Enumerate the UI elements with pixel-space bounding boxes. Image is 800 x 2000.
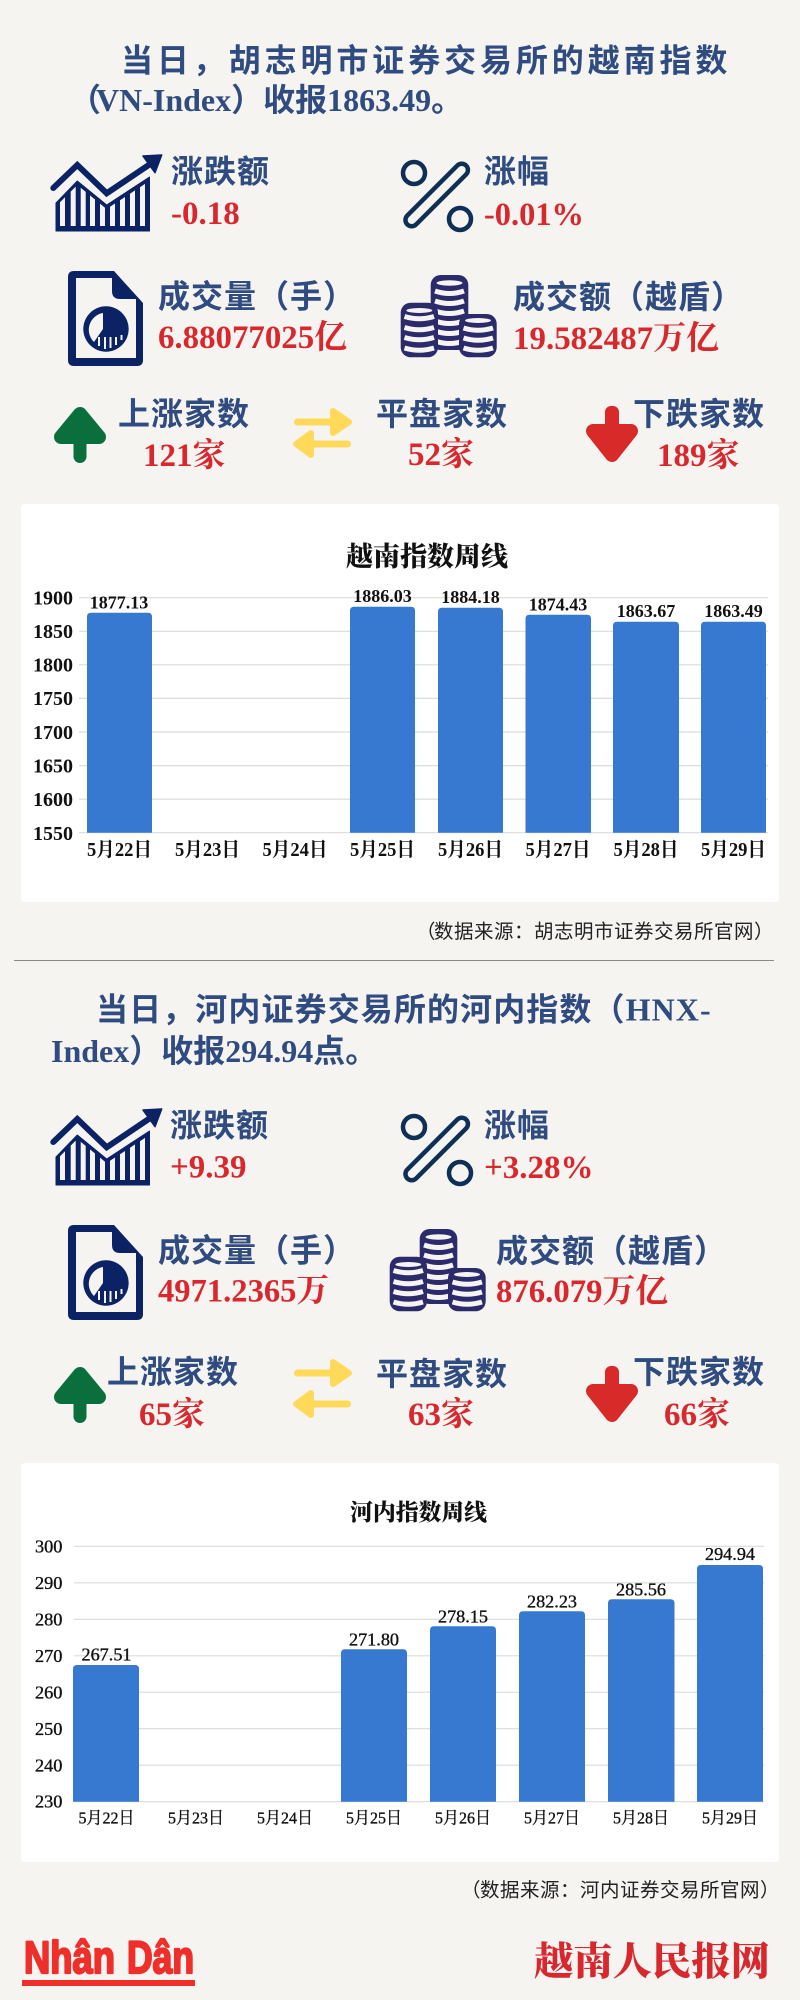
- section title: HNX-Index: [51, 992, 712, 1069]
- bar value labels: 1886.03: [353, 586, 412, 606]
- value: unchanged: 63家: [408, 1396, 474, 1433]
- y axis labels: [35, 1536, 62, 1812]
- bar value labels: [90, 586, 763, 621]
- value: volume: 4971.2365万: [158, 1274, 329, 1310]
- icon: green up arrow: [61, 414, 99, 463]
- icon: rising chart: [53, 1109, 162, 1185]
- bar value labels: [82, 1544, 755, 1665]
- data source note: （: [461, 1880, 481, 1902]
- icon: percent: [403, 162, 471, 230]
- value: declining: 66家: [664, 1396, 730, 1433]
- label: turnover: 成交额（越盾）: [496, 1233, 727, 1269]
- x axis labels: [87, 838, 766, 861]
- icon: red down arrow: [593, 1366, 631, 1415]
- y axis labels: 1850: [33, 621, 73, 643]
- y axis labels: 270: [35, 1646, 62, 1666]
- data source note: （: [416, 921, 436, 943]
- chart title: 河内指数周线: [350, 1500, 487, 1525]
- section title: HNX-Index: 当日，河内证券交易所的河内指数（HNX-: [96, 992, 712, 1028]
- section title: VN-Index: （: [69, 82, 101, 118]
- value: volume: 6.88077025亿: [158, 319, 347, 356]
- bar value labels: 1874.43: [529, 594, 587, 614]
- label: volume: 成交量（手）: [158, 1232, 356, 1268]
- chart title: 越南指数周线: [346, 541, 508, 572]
- x axis labels: 5月24日: [257, 1808, 313, 1827]
- bar value labels: 1863.49: [704, 601, 763, 621]
- label: advancing: 上涨家数: [107, 1354, 239, 1390]
- panel: HNX-Index weekly bar chart: [21, 1463, 779, 1862]
- logo: Nhan Dan: [22, 1932, 195, 1986]
- value: change percent: -0.01%: [484, 197, 584, 233]
- icon: coin stacks: [401, 275, 497, 357]
- label: volume: 成交量（手）: [158, 278, 356, 314]
- bar value labels: 282.23: [527, 1591, 577, 1611]
- logo: Nhan Dan: Dân: [127, 1932, 194, 1983]
- y axis labels: 1750: [33, 688, 73, 710]
- label: turnover: 成交额（越盾）: [513, 279, 744, 315]
- y axis labels: 280: [35, 1610, 62, 1630]
- bars: [87, 607, 766, 833]
- value: change amount: +9.39: [170, 1150, 247, 1186]
- x axis labels: 5月26日: [435, 1808, 491, 1827]
- x axis labels: 5月25日: [350, 838, 415, 861]
- y axis labels: 260: [35, 1682, 62, 1702]
- section title: HNX-Index: Index）收报294.94点。: [51, 1033, 377, 1069]
- label: change amount: 涨跌额: [170, 1108, 269, 1144]
- icon: yellow swap arrows: [294, 1362, 351, 1415]
- x axis labels: 5月22日: [87, 838, 152, 861]
- data source note: 数据来源：河内证券交易所官网）: [480, 1880, 780, 1902]
- x axis labels: 5月23日: [175, 838, 240, 861]
- x axis labels: 5月24日: [262, 838, 328, 861]
- x axis labels: 5月28日: [613, 1808, 669, 1827]
- bar value labels: 271.80: [349, 1629, 399, 1649]
- section title: VN-Index: [69, 42, 731, 118]
- section title: VN-Index: 当日，胡志明市证券交易所的越南指数: [121, 42, 731, 78]
- value: declining: 189家: [657, 437, 740, 474]
- icon: percent: [403, 1116, 471, 1184]
- label: change percent: 涨幅: [484, 154, 550, 190]
- x axis labels: 5月28日: [614, 838, 678, 861]
- x axis labels: 5月29日: [701, 838, 766, 861]
- value: turnover: 19.582487万亿: [513, 320, 719, 357]
- y axis labels: 250: [35, 1719, 62, 1739]
- bar value labels: 1877.13: [90, 592, 148, 612]
- y axis labels: [33, 587, 73, 845]
- y axis labels: 1550: [33, 823, 73, 845]
- x axis labels: [78, 1808, 758, 1827]
- y axis labels: 1600: [33, 789, 73, 811]
- x axis labels: 5月26日: [438, 838, 503, 861]
- label: change percent: 涨幅: [484, 1108, 550, 1144]
- y axis labels: 1900: [33, 587, 73, 609]
- x axis labels: 5月29日: [702, 1808, 758, 1827]
- y axis labels: 1650: [33, 756, 73, 778]
- panel: VN-Index weekly bar chart: [21, 504, 779, 902]
- bar value labels: 1863.67: [617, 601, 675, 621]
- x axis labels: 5月27日: [524, 1808, 580, 1827]
- bar value labels: 278.15: [438, 1606, 488, 1626]
- y axis labels: 1700: [33, 722, 73, 744]
- bar value labels: 267.51: [82, 1645, 132, 1665]
- bar value labels: 285.56: [616, 1579, 666, 1599]
- label: unchanged: 平盘家数: [376, 1356, 508, 1392]
- value: change percent: +3.28%: [484, 1150, 594, 1186]
- label: declining: 下跌家数: [633, 396, 765, 432]
- icon: red down arrow: [593, 406, 631, 455]
- bar value labels: 1884.18: [441, 587, 500, 607]
- y axis labels: 300: [35, 1536, 62, 1556]
- value: advancing: 121家: [143, 437, 226, 474]
- label: declining: 下跌家数: [633, 1354, 765, 1390]
- bars: [73, 1565, 763, 1802]
- icon: document with pie chart: [68, 1225, 143, 1320]
- section title: VN-Index: VN-Index）收报1863.49。: [96, 82, 463, 118]
- x axis labels: 5月23日: [168, 1808, 224, 1827]
- x axis labels: 5月22日: [78, 1808, 134, 1827]
- data source note: 数据来源：胡志明市证券交易所官网）: [434, 921, 774, 943]
- icon: coin stacks: [390, 1229, 486, 1311]
- value: advancing: 65家: [139, 1396, 205, 1433]
- icon: yellow swap arrows: [294, 411, 351, 455]
- value: turnover: 876.079万亿: [496, 1273, 668, 1310]
- icon: green up arrow: [61, 1374, 99, 1423]
- label: unchanged: 平盘家数: [376, 396, 508, 432]
- bar value labels: 294.94: [705, 1544, 755, 1564]
- value: change amount: -0.18: [171, 196, 240, 232]
- x axis labels: 5月27日: [526, 838, 590, 861]
- label: advancing: 上涨家数: [118, 396, 250, 432]
- label: change amount: 涨跌额: [171, 154, 270, 190]
- icon: document with pie chart: [68, 271, 143, 366]
- y axis labels: 230: [35, 1792, 62, 1812]
- x axis labels: 5月25日: [346, 1808, 402, 1827]
- y axis labels: 290: [35, 1573, 62, 1593]
- y axis labels: 240: [35, 1756, 62, 1776]
- footer brand name: 越南人民报网: [534, 1941, 770, 1984]
- logo: Nhan Dan: Nhân: [24, 1932, 115, 1983]
- value: unchanged: 52家: [408, 436, 474, 473]
- icon: rising chart: [53, 155, 162, 231]
- y axis labels: 1800: [33, 654, 73, 676]
